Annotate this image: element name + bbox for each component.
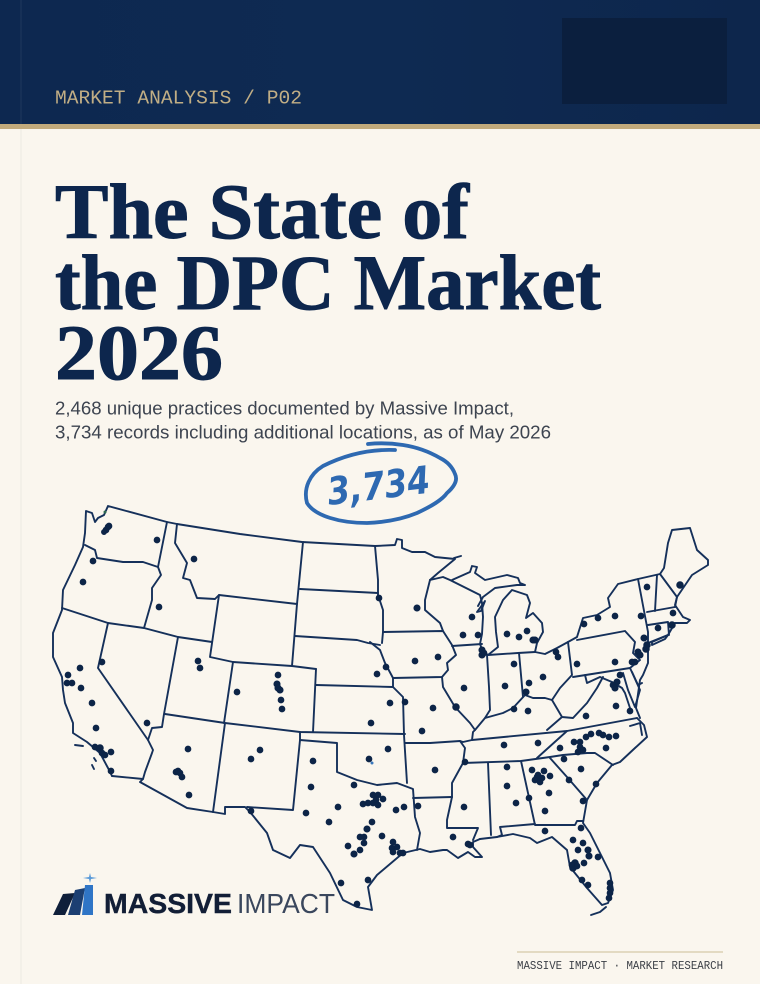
- logo: [53, 873, 335, 919]
- subtitle: 3,734 records including additional locations, as of May 2026: [55, 422, 551, 442]
- title: the DPC Market: [55, 239, 601, 326]
- handwritten number: 3,734: [325, 458, 432, 514]
- washington oregon idaho: [85, 545, 158, 567]
- subtitle: [55, 398, 551, 442]
- idaho montana border: [175, 524, 219, 599]
- US map: [53, 506, 708, 915]
- header band: [0, 0, 760, 129]
- lake superior and wisconsin shore: [430, 577, 488, 655]
- wyoming: [210, 595, 297, 666]
- title: The State of: [55, 168, 470, 255]
- subtitle: 2,468 unique practices documented by Massive Impact,: [55, 398, 514, 418]
- california islands: [75, 745, 83, 746]
- arkansas louisiana missouri: [405, 741, 478, 840]
- northeast outline: [535, 528, 708, 718]
- oklahoma texas: [300, 740, 420, 850]
- logo: IMPACT: [237, 888, 335, 919]
- footer label: MASSIVE IMPACT · MARKET RESEARCH: [517, 959, 723, 973]
- logo icon: rising bars: [53, 873, 97, 915]
- mississippi to kentucky: [442, 677, 475, 742]
- nevada and california: [98, 623, 153, 779]
- lower michigan: [488, 590, 543, 655]
- iowa minnesota wisconsin: [383, 631, 456, 678]
- southeast coast: [480, 718, 647, 905]
- title: 2026: [55, 309, 223, 396]
- handwritten callout: 3,734: [306, 443, 456, 523]
- practice location dots: [64, 510, 683, 907]
- dakotas nebraska kansas: [297, 542, 303, 604]
- logo wordmark: MASSIVE: [104, 888, 232, 919]
- maryland virginia west virginia: [585, 675, 630, 708]
- header gold rule: [0, 124, 760, 129]
- state outlines: [53, 506, 708, 915]
- georgia south carolina alabama mississippi florida: [550, 758, 587, 800]
- long island: [652, 635, 668, 645]
- upper michigan: [452, 566, 525, 606]
- illinois indiana ohio: [485, 655, 490, 718]
- national outline: west and north: [53, 506, 455, 776]
- new york and new england borders: [638, 579, 648, 643]
- title: [55, 168, 601, 396]
- outer banks: [630, 723, 642, 735]
- header dark panel: [562, 18, 727, 104]
- utah colorado arizona new mexico: [224, 662, 233, 723]
- gulf coast: [112, 776, 482, 910]
- header label: MARKET ANALYSIS / P02: [55, 88, 302, 110]
- hand-drawn ellipse: [306, 443, 456, 523]
- kentucky tennessee north carolina: [547, 717, 562, 730]
- pennsylvania: [573, 631, 640, 677]
